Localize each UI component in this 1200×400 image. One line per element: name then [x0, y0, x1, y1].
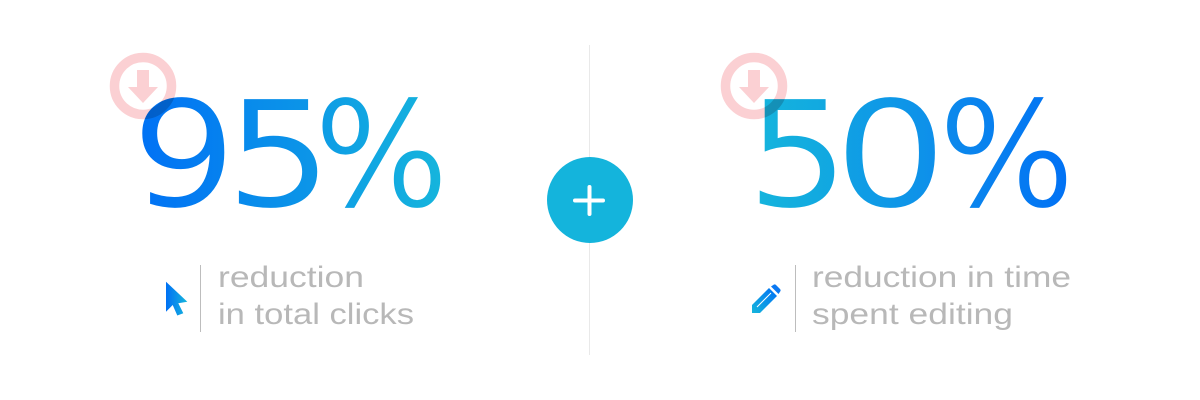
big number: 50%	[746, 69, 1075, 242]
icon: mouse cursor	[166, 282, 187, 316]
caption: reduction in time spent editing: spent editing	[812, 298, 1013, 331]
caption: reduction in time spent editing	[812, 261, 1071, 331]
big number: 95%: 5	[225, 69, 333, 242]
plus button	[547, 157, 633, 243]
caption: reduction in total clicks: in total clicks	[218, 298, 414, 331]
icon: pencil	[752, 284, 781, 313]
caption: reduction in total clicks: reduction	[218, 261, 364, 294]
big number: 50%: 0	[834, 69, 948, 242]
big number: 95%	[131, 69, 449, 242]
icon: down arrow badge	[726, 58, 782, 114]
caption: reduction in time spent editing: reduction in time	[812, 261, 1071, 294]
big number: 95%: %	[314, 70, 449, 242]
center divider line	[589, 45, 590, 355]
big number: 50%: 5	[746, 69, 849, 242]
separator	[795, 265, 796, 332]
caption: reduction in total clicks	[218, 261, 414, 331]
big number: 95%: 9	[131, 70, 237, 242]
icon: down arrow badge	[114, 58, 172, 114]
separator	[200, 265, 201, 332]
panel: 50% reduction in time spent editing	[726, 58, 1075, 332]
big number: 50%: %	[938, 70, 1075, 242]
panel: 95% reduction in total clicks	[114, 58, 449, 332]
